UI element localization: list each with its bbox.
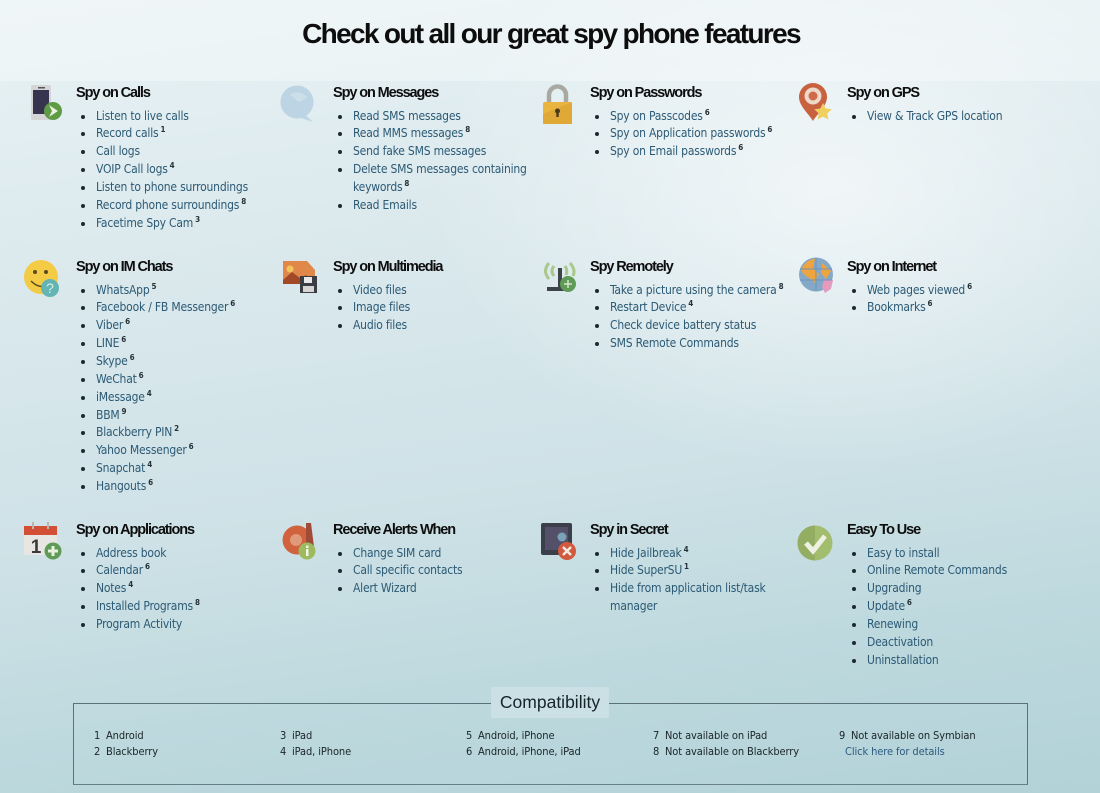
panel: Spy on Passwords: [590, 85, 772, 158]
heading: Spy Remotely: Spy Remotely: [590, 259, 673, 275]
list: ease of use features: Deactivation: [867, 635, 933, 649]
list: passwords features: Spy on Email passwords6: [610, 143, 743, 158]
legend column 4: 8: [653, 744, 659, 758]
title: Check out all our great spy phone features: [302, 18, 800, 49]
list: messages features: Delete SMS messages containing: [353, 162, 527, 176]
list: IM features: LINE6: [96, 335, 126, 350]
legend column 1: 1: [94, 728, 100, 742]
list: calls features: Facetime Spy Cam3: [96, 215, 200, 230]
list: secret features: Hide from application list/task: [610, 581, 766, 595]
icon: calendar with plus: [24, 522, 62, 560]
list: passwords features: Spy on Passcodes6: [610, 108, 710, 123]
heading: Spy on GPS: Spy on GPS: [847, 85, 919, 101]
heading: Easy To Use: Easy To Use: [847, 522, 920, 538]
heading: Spy on IM Chats: Spy on IM Chats: [76, 259, 172, 275]
icon: calendar with plus: 1: [31, 537, 42, 558]
legend column 3: [466, 728, 581, 758]
icon: smiley with question mark: ?: [46, 280, 54, 296]
list: calls features: Record phone surroundings8: [96, 197, 246, 212]
list: secret features: manager: [610, 599, 657, 613]
panel: Receive Alerts When: [333, 522, 462, 595]
list: messages features: Send fake SMS messages: [353, 144, 486, 158]
list: IM features: BBM9: [96, 406, 126, 422]
list: messages features: Read SMS messages: [353, 109, 461, 123]
list: calls features: VOIP Call logs4: [96, 161, 174, 176]
icon: bell with info: [282, 523, 316, 560]
icon: phone with arrow: [31, 85, 62, 120]
list: calls features: Call logs: [96, 144, 140, 158]
list: multimedia features: Video files: [353, 283, 407, 297]
list: internet features: Web pages viewed6: [867, 282, 972, 297]
list: ease of use features: Easy to install: [867, 546, 939, 560]
list: remote features: SMS Remote Commands: [610, 336, 739, 350]
list: remote features: Take a picture using the camera8: [610, 282, 783, 297]
list: IM features: iMessage4: [96, 389, 152, 404]
panel: Spy on IM Chats: [76, 259, 235, 493]
icon: padlock: [543, 84, 572, 124]
legend column 5: Not available on Symbian: [851, 728, 976, 742]
list: messages features: keywords8: [353, 179, 409, 194]
legend column 4: Not available on iPad: [665, 728, 767, 742]
legend column 3: Android, iPhone: [478, 728, 554, 742]
legend column 3: Android, iPhone, iPad: [478, 744, 581, 758]
list: calls features: Listen to phone surroundings: [96, 180, 248, 194]
list: calls features: Record calls1: [96, 125, 165, 140]
legend column 5: Click here for details: [845, 744, 945, 758]
legend column 4: 7: [653, 728, 659, 742]
legend column 1: 2: [94, 744, 100, 758]
legend column 5: [839, 728, 976, 760]
heading: Compatibility: [491, 687, 609, 718]
panel: Spy on Applications: [76, 522, 200, 631]
legend column 2: 3: [280, 728, 286, 742]
icon: map pin with star: [799, 83, 832, 121]
list: IM features: Blackberry PIN2: [96, 424, 179, 439]
legend column 4: [653, 728, 799, 758]
list: messages features: [338, 109, 527, 212]
list: IM features: WhatsApp5: [96, 282, 156, 297]
heading: Spy on Messages: Spy on Messages: [333, 85, 438, 101]
icon: antenna with signal: [544, 262, 576, 292]
list: remote features: Restart Device4: [610, 299, 693, 314]
panel: Spy on Messages: [333, 85, 527, 212]
list: messages features: Read Emails: [353, 198, 417, 212]
list: alerts features: Alert Wizard: [353, 581, 416, 595]
heading: Spy on Multimedia: Spy on Multimedia: [333, 259, 442, 275]
legend column 2: 4: [280, 744, 286, 758]
panel: Spy on Multimedia: [333, 259, 444, 332]
heading: Spy on Applications: Spy on Applications: [76, 522, 194, 538]
heading: Spy on Internet: Spy on Internet: [847, 259, 936, 275]
list: ease of use features: Online Remote Commands: [867, 563, 1007, 577]
legend column 2: iPad: [292, 728, 312, 742]
list: applications features: Calendar6: [96, 562, 150, 577]
list: internet features: [852, 282, 972, 314]
list: ease of use features: [852, 546, 1007, 667]
panel: compatibility legend: [73, 703, 1028, 785]
list: multimedia features: Audio files: [353, 318, 407, 332]
list: IM features: [81, 282, 235, 493]
legend column 1: Blackberry: [106, 744, 158, 758]
list: IM features: Viber6: [96, 317, 130, 332]
list: ease of use features: Uninstallation: [867, 653, 939, 667]
icon: speech bubble: [280, 86, 314, 122]
heading: Spy in Secret: Spy in Secret: [590, 522, 668, 538]
list: remote features: Check device battery status: [610, 318, 756, 332]
list: passwords features: [595, 108, 772, 158]
legend column 1: Android: [106, 728, 144, 742]
icon: green check mark: [798, 526, 832, 560]
panel: Easy To Use: [847, 522, 1007, 667]
list: secret features: Hide Jailbreak4: [610, 545, 688, 560]
panel: Spy on Internet: [847, 259, 972, 314]
legend column 3: 6: [466, 744, 472, 758]
icon: image with floppy disk: [283, 261, 317, 293]
list: alerts features: Call specific contacts: [353, 563, 462, 577]
list: ease of use features: Upgrading: [867, 581, 921, 595]
list: applications features: Notes4: [96, 580, 133, 595]
list: internet features: Bookmarks6: [867, 299, 932, 314]
list: secret features: Hide SuperSU1: [610, 562, 689, 577]
legend column 4: Not available on Blackberry: [665, 744, 799, 758]
list: messages features: Read MMS messages8: [353, 125, 470, 140]
list: ease of use features: Renewing: [867, 617, 918, 631]
list: alerts features: [338, 546, 462, 595]
list: IM features: Yahoo Messenger6: [96, 442, 193, 457]
list: calls features: Listen to live calls: [96, 109, 189, 123]
list: secret features: [595, 545, 766, 613]
list: IM features: Hangouts6: [96, 478, 153, 493]
list: GPS features: View & Track GPS location: [867, 109, 1002, 123]
list: calls features: [81, 109, 248, 230]
list: ease of use features: Update6: [867, 598, 912, 613]
list: remote features: [595, 282, 784, 350]
list: passwords features: Spy on Application passwords6: [610, 125, 772, 140]
list: alerts features: Change SIM card: [353, 546, 441, 560]
legend column 3: 5: [466, 728, 472, 742]
legend column 2: iPad, iPhone: [292, 744, 351, 758]
heading: Spy on Calls: Spy on Calls: [76, 85, 150, 101]
list: IM features: Skype6: [96, 353, 134, 368]
heading: Spy on Passwords: Spy on Passwords: [590, 85, 701, 101]
icon: globe with cursor: [799, 258, 833, 293]
list: applications features: Address book: [96, 546, 166, 560]
legend column 1: [94, 728, 158, 758]
list: applications features: Installed Programs8: [96, 598, 200, 613]
legend column 5: 9: [839, 728, 845, 742]
list: IM features: Facebook / FB Messenger6: [96, 299, 235, 314]
list: applications features: Program Activity: [96, 617, 182, 631]
list: applications features: [81, 546, 200, 631]
legend column 2: [280, 728, 351, 758]
panel: Spy in Secret: [590, 522, 766, 613]
heading: Receive Alerts When: Receive Alerts When: [333, 522, 455, 538]
panel: Spy on Calls: [76, 85, 248, 230]
panel: Spy Remotely: [590, 259, 784, 350]
panel: Spy on GPS: [847, 85, 1002, 123]
list: IM features: Snapchat4: [96, 460, 152, 475]
list: IM features: WeChat6: [96, 371, 143, 386]
list: multimedia features: [338, 283, 410, 332]
icon: smiley with question mark: [24, 260, 59, 297]
heading: Compatibility: Compatibility: [500, 692, 600, 712]
list: multimedia features: Image files: [353, 300, 410, 314]
icon: safe with cross: [541, 523, 576, 560]
